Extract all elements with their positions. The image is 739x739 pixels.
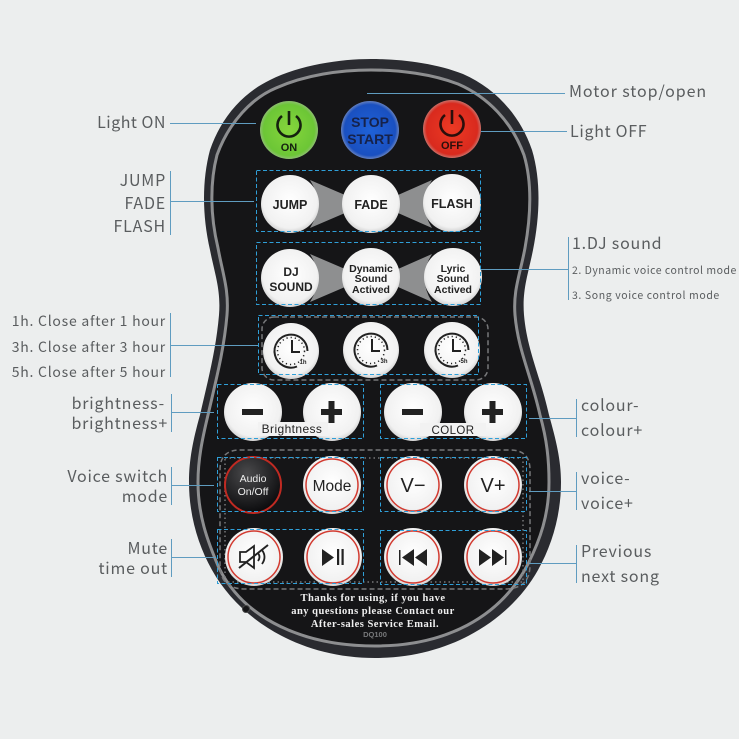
label: jump fade flash: FLASH <box>114 213 166 237</box>
label: voice switch mode: mode <box>122 483 168 507</box>
sound mode buttons: Sound <box>355 273 387 285</box>
sound mode buttons: Actived <box>352 284 390 296</box>
sound mode buttons: DJ <box>283 265 299 279</box>
label: timer options <box>12 311 166 382</box>
power and motor buttons row <box>260 100 481 159</box>
voice row buttons: Audio <box>240 473 267 485</box>
label: mute time out: Mute <box>127 535 168 559</box>
label: light off: Light OFF <box>570 118 647 142</box>
label: colour <box>581 392 643 441</box>
label: sound modes: 2. Dynamic voice control mode <box>572 263 737 278</box>
icon: clock 1h: 1h <box>299 360 307 366</box>
after-sales message: After-sales Service Email. <box>311 619 439 630</box>
label: mute time out <box>98 535 168 579</box>
label: voice: voice+ <box>581 490 634 514</box>
voice row buttons: V− <box>400 475 426 497</box>
sound mode buttons: Dynamic <box>349 263 393 275</box>
color buttons <box>384 383 522 441</box>
brightness buttons: Brightness <box>262 422 322 436</box>
icon: mute <box>225 528 283 586</box>
icon: clock 5h: 5h <box>460 359 468 365</box>
brightness buttons <box>224 383 361 441</box>
label: jump fade flash: JUMP <box>120 167 166 191</box>
icon: next <box>464 528 522 586</box>
label: light on: Light ON <box>97 109 166 133</box>
timer buttons <box>263 322 480 379</box>
dashed highlight boxes <box>218 170 526 584</box>
label: voice switch mode <box>67 463 168 507</box>
label: sound modes <box>572 230 737 303</box>
label: sound modes: 3. Song voice control mode <box>572 288 720 303</box>
sound mode buttons: Actived <box>434 284 472 296</box>
button: stop start <box>341 101 399 159</box>
button: light on <box>260 101 318 159</box>
label: mute time out: time out <box>98 555 168 579</box>
label: colour: colour+ <box>581 417 643 441</box>
leader lines <box>170 94 576 583</box>
label: brightness <box>71 390 168 434</box>
remote control body <box>189 59 561 658</box>
light effect buttons <box>261 174 481 233</box>
button: light off <box>423 100 481 158</box>
label: timer options: 5h. Close after 5 hour <box>12 362 166 382</box>
icon: clock 3h <box>343 322 399 378</box>
label: sound modes: 1.DJ sound <box>572 230 662 254</box>
button: light off: OFF <box>441 140 463 152</box>
label: voice switch mode: Voice switch <box>67 463 168 487</box>
label: timer options: 3h. Close after 3 hour <box>12 337 166 357</box>
light effect buttons: FLASH <box>431 197 473 211</box>
sound mode buttons: Sound <box>437 273 469 285</box>
after-sales message <box>291 593 455 630</box>
icon: clock 1h <box>263 323 319 379</box>
label: previous next song: next song <box>581 563 660 587</box>
label: jump fade flash: FADE <box>124 190 166 214</box>
light effect buttons: JUMP <box>273 198 307 212</box>
icon: previous <box>384 528 442 586</box>
label: voice: voice- <box>581 465 631 489</box>
after-sales message: Thanks for using, if you have <box>300 593 446 604</box>
playback row buttons <box>225 528 522 586</box>
button: stop start: STOP <box>351 114 389 130</box>
label: brightness: brightness- <box>72 390 165 414</box>
sound mode buttons: SOUND <box>269 280 313 294</box>
mode connector shapes <box>310 180 432 302</box>
label: previous next song <box>581 538 660 587</box>
sound mode buttons <box>261 248 482 307</box>
label: colour: colour- <box>581 392 639 416</box>
model number: DQ100 <box>363 630 387 639</box>
voice row buttons: V+ <box>480 475 506 497</box>
voice row buttons: Mode <box>313 478 351 495</box>
color buttons: COLOR <box>432 425 474 437</box>
icon: clock 5h <box>424 322 480 378</box>
label: jump fade flash <box>114 167 166 237</box>
label: motor stop/open: Motor stop/open <box>569 78 707 102</box>
voice row buttons: On/Off <box>238 486 268 498</box>
voice row buttons <box>225 456 522 514</box>
icon: clock 3h: 3h <box>380 359 388 365</box>
label: voice <box>581 465 634 514</box>
light effect buttons: FADE <box>354 198 388 212</box>
label: timer options: 1h. Close after 1 hour <box>12 311 166 331</box>
label: previous next song: Previous <box>581 538 652 562</box>
sound mode buttons: Lyric <box>441 263 466 275</box>
after-sales message: any questions please Contact our <box>291 606 455 617</box>
button: light on: ON <box>281 142 297 154</box>
button: stop start: START <box>347 131 393 147</box>
label: brightness: brightness+ <box>71 410 168 434</box>
icon: play pause <box>304 528 362 586</box>
